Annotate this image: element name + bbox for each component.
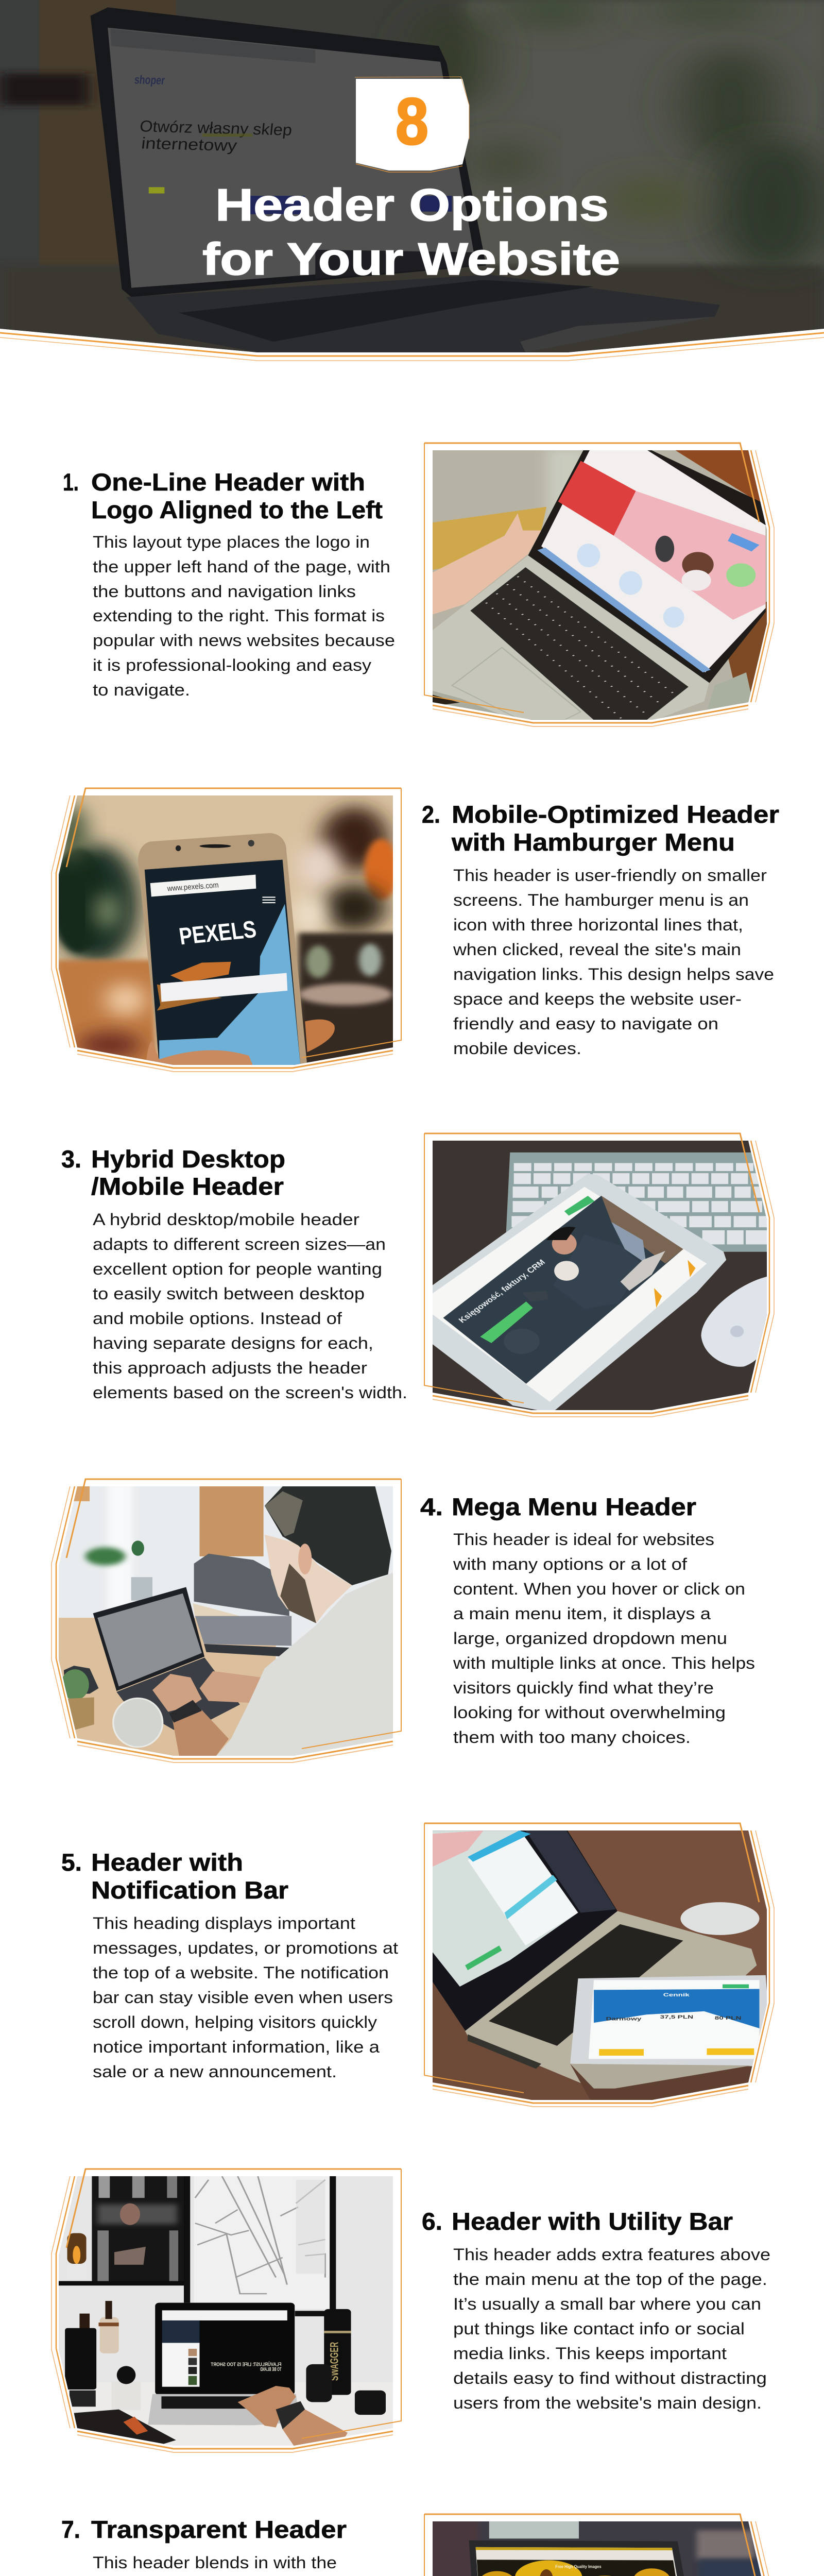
photo frame 4: [52, 1479, 401, 1762]
heading 7: 7.: [61, 2516, 80, 2543]
photo 6: laptop on styled desk with map poster: TO BE BLAND: [260, 2366, 281, 2372]
body 2: friendly and easy to navigate on: [453, 1014, 718, 1033]
photo 5: laptop and tablet on wood desk: Cennik: [663, 1992, 690, 1997]
photo frame 6: [52, 2169, 401, 2452]
body 6: It’s usually a small bar where you can: [453, 2295, 761, 2313]
body 4: large, organized dropdown menu: [453, 1629, 727, 1648]
photo 4: man typing on laptop: [52, 1484, 402, 1759]
heading 3: /Mobile Header: [91, 1173, 284, 1200]
hero bottom edge lines: [0, 333, 824, 361]
body 7: This header blends in with the: [93, 2553, 337, 2572]
heading 3: Hybrid Desktop: [91, 1145, 285, 1173]
heading 2: 2.: [422, 801, 440, 828]
hero photo: laptop on desk: [0, 0, 824, 370]
body 2: icon with three horizontal lines that,: [453, 916, 743, 934]
body 5: notice important information, like a: [93, 2038, 380, 2056]
body 6: This header adds extra features above: [453, 2245, 770, 2264]
panel: item 4: [52, 1479, 755, 1762]
body 5: This heading displays important: [93, 1914, 355, 1933]
body 3: to easily switch between desktop: [93, 1284, 365, 1303]
panel: hero banner: [0, 0, 824, 370]
number badge: [355, 77, 469, 172]
heading 5: Notification Bar: [91, 1876, 288, 1904]
photo 1: laptop seen from above: [420, 446, 778, 725]
body 5: sale or a new announcement.: [93, 2062, 337, 2081]
body 3: elements based on the screen's width.: [93, 1383, 407, 1402]
heading 3: 3.: [61, 1145, 81, 1173]
photo frame 7: [424, 2514, 774, 2576]
body 3: adapts to different screen sizes—an: [93, 1235, 386, 1253]
title: for Your Website: [202, 233, 620, 284]
panel: item 1: [63, 443, 778, 726]
heading 5: Header with: [91, 1849, 243, 1876]
photo 7: laptop on rustic table: [427, 2520, 778, 2576]
photo frame 5: [424, 1823, 774, 2107]
hero photo: laptop on desk: shoper: [134, 73, 165, 88]
body 4: a main menu item, it displays a: [453, 1604, 711, 1623]
photo 3: tablet on keyboard: Księgowość, faktury, CRM: [456, 1258, 547, 1325]
body 1: [93, 533, 395, 699]
body 6: [453, 2245, 770, 2412]
body 6: details easy to find without distracting: [453, 2369, 767, 2387]
body 2: [453, 866, 774, 1058]
panel: item 3: [61, 1133, 778, 1417]
photo frame 1: [424, 443, 774, 726]
body 4: [453, 1530, 755, 1747]
heading 4: 4.: [420, 1493, 443, 1520]
body 3: this approach adjusts the header: [93, 1359, 367, 1377]
body 2: space and keeps the website user-: [453, 990, 742, 1008]
heading 1: One-Line Header with: [91, 468, 365, 496]
photo 6: laptop on styled desk with map poster: FLAVÜRLUST: LIFE IS TOO SHORT: [211, 2361, 281, 2367]
heading 2: with Hamburger Menu: [451, 828, 735, 856]
body 2: This header is user-friendly on smaller: [453, 866, 767, 885]
heading 6: Header with Utility Bar: [452, 2208, 733, 2235]
body 1: it is professional-looking and easy: [93, 656, 371, 674]
body 4: This header is ideal for websites: [453, 1530, 714, 1549]
body 1: the upper left hand of the page, with: [93, 557, 390, 576]
body 1: extending to the right. This format is: [93, 606, 385, 625]
body 1: popular with news websites because: [93, 631, 395, 650]
photo 5: laptop and tablet on wood desk: [426, 1827, 783, 2107]
body 4: visitors quickly find what they’re: [453, 1679, 714, 1697]
body 5: scroll down, helping visitors quickly: [93, 2013, 377, 2031]
body 3: [93, 1210, 407, 1402]
photo 7: laptop on rustic table: Free High Quality Images: [555, 2564, 602, 2569]
hero photo: laptop on desk: internetowy: [141, 134, 238, 155]
hero photo: laptop on desk: Otwórz własny sklep: [139, 117, 293, 139]
title: [202, 179, 620, 284]
heading 1: [63, 468, 383, 523]
title: Header Options: [215, 179, 609, 230]
body 3: having separate designs for each,: [93, 1334, 373, 1352]
photo 6: laptop on styled desk with map poster: [52, 2175, 402, 2449]
panel: item 6: [52, 2169, 770, 2452]
body 6: the main menu at the top of the page.: [453, 2270, 767, 2289]
photo 6: laptop on styled desk with map poster: SWAGGER: [329, 2342, 341, 2381]
heading 1: 1.: [63, 468, 79, 496]
body 1: the buttons and navigation links: [93, 582, 356, 601]
photo 5: laptop and tablet on wood desk: Darmowy: [606, 2016, 642, 2022]
body 4: content. When you hover or click on: [453, 1580, 745, 1598]
body 5: [93, 1914, 398, 2081]
body 5: bar can stay visible even when users: [93, 1988, 393, 2007]
photo 5: laptop and tablet on wood desk: 37,5 PLN: [660, 2014, 693, 2020]
heading 2: [422, 801, 779, 856]
body 4: with multiple links at once. This helps: [453, 1654, 755, 1672]
photo 2: phone showing Pexels: PEXELS: [177, 916, 258, 950]
heading 2: Mobile-Optimized Header: [452, 801, 779, 828]
body 4: with many options or a lot of: [453, 1555, 687, 1573]
panel: item 7: [61, 2514, 778, 2576]
body 2: screens. The hamburger menu is an: [453, 891, 749, 909]
body 3: and mobile options. Instead of: [93, 1309, 342, 1328]
photo frame 2: [52, 788, 401, 1072]
number badge: 8: [396, 85, 428, 159]
body 6: put things like contact info or social: [453, 2319, 745, 2338]
body 5: messages, updates, or promotions at: [93, 1939, 398, 1957]
body 3: A hybrid desktop/mobile header: [93, 1210, 359, 1229]
body 3: excellent option for people wanting: [93, 1260, 382, 1278]
body 5: the top of a website. The notification: [93, 1963, 389, 1982]
photo 5: laptop and tablet on wood desk: 80 PLN: [715, 2015, 742, 2021]
heading 3: [61, 1145, 285, 1200]
body 1: This layout type places the logo in: [93, 533, 370, 551]
heading 7: Transparent Header: [91, 2516, 347, 2543]
body 4: them with too many choices.: [453, 1728, 691, 1747]
photo 2: phone showing Pexels: www.pexels.com: [166, 881, 219, 893]
heading 5: 5.: [61, 1849, 82, 1876]
photo 3: tablet on keyboard: [427, 1139, 778, 1412]
heading 4: Mega Menu Header: [452, 1493, 696, 1520]
body 6: media links. This keeps important: [453, 2344, 727, 2363]
photo frame 3: [424, 1133, 774, 1417]
body 4: looking for without overwhelming: [453, 1703, 726, 1722]
photo 2: phone showing Pexels: [52, 794, 404, 1070]
heading 1: Logo Aligned to the Left: [91, 496, 383, 523]
body 2: navigation links. This design helps save: [453, 965, 774, 984]
heading 6: 6.: [422, 2208, 442, 2235]
heading 5: [61, 1849, 288, 1904]
body 6: users from the website's main design.: [453, 2394, 762, 2412]
body 2: when clicked, reveal the site's main: [453, 940, 741, 959]
body 1: to navigate.: [93, 681, 190, 699]
panel: item 5: [61, 1823, 783, 2107]
body 2: mobile devices.: [453, 1039, 581, 1058]
panel: item 2: [52, 788, 779, 1072]
